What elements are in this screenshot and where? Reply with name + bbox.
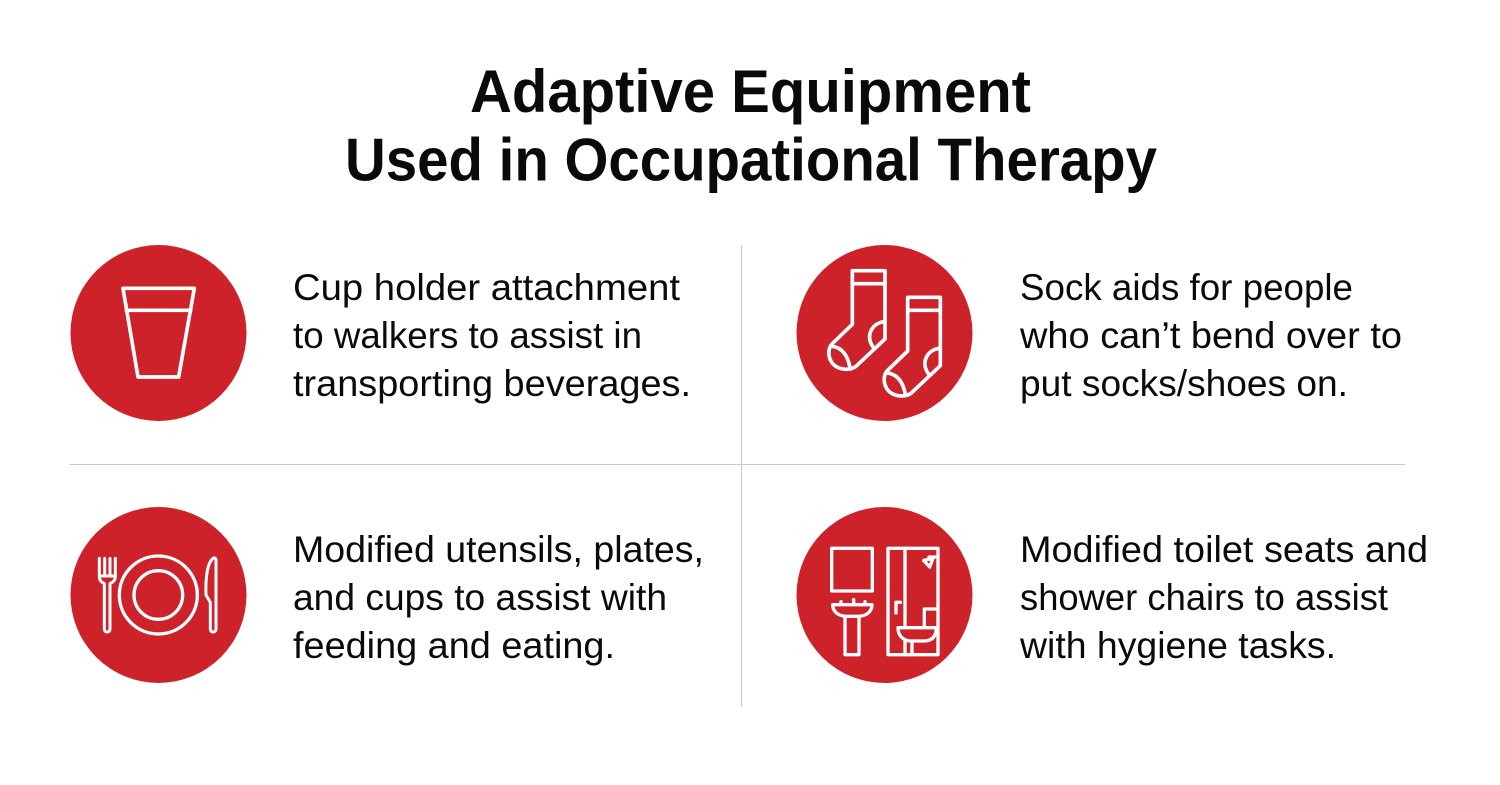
- text: cup holder description: [293, 267, 691, 404]
- text: modified utensils description: [293, 529, 704, 666]
- text: cup holder description: to walkers to assist in: [293, 315, 642, 356]
- icon: cup: [70, 245, 246, 421]
- panel: sock aids: [796, 245, 1402, 421]
- text: sock aids description: [1019, 267, 1402, 404]
- text: toilet seats description: [1019, 529, 1428, 666]
- text: toilet seats description: with hygiene tasks.: [1019, 625, 1336, 666]
- panel: cup holder: [70, 245, 691, 421]
- icon: plate and cutlery: [70, 507, 246, 683]
- text: cup holder description: Cup holder attachment: [293, 267, 681, 308]
- text: modified utensils description: Modified utensils, plates,: [293, 529, 704, 570]
- title: Adaptive Equipment: [470, 58, 1031, 125]
- title: Used in Occupational Therapy: [345, 126, 1158, 194]
- panel: modified utensils: [70, 507, 704, 683]
- text: sock aids description: Sock aids for people: [1020, 267, 1353, 308]
- text: modified utensils description: and cups to assist with: [293, 577, 667, 618]
- text: toilet seats description: Modified toilet seats and: [1020, 529, 1428, 570]
- icon: bathroom: [796, 507, 972, 683]
- text: sock aids description: who can’t bend over to: [1019, 315, 1402, 356]
- panel: toilet seats and shower chairs: [796, 507, 1428, 683]
- text: cup holder description: transporting beverages.: [293, 363, 691, 404]
- text: modified utensils description: feeding and eating.: [293, 625, 615, 666]
- title: [345, 58, 1158, 194]
- text: toilet seats description: shower chairs to assist: [1020, 577, 1389, 618]
- text: sock aids description: put socks/shoes on.: [1020, 363, 1348, 404]
- icon: socks: [796, 245, 972, 421]
